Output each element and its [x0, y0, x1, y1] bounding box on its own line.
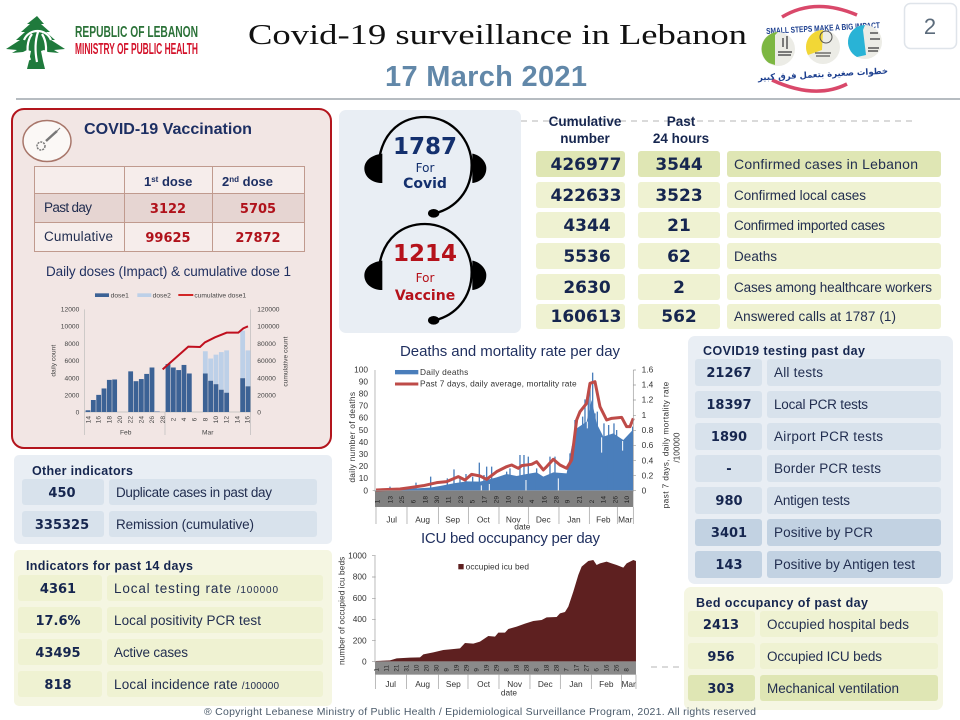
row: incidence rate [18, 671, 323, 697]
chart: ICU bed occupancy: Aug [415, 679, 430, 689]
chart: ICU bed occupancy: Nov [507, 679, 523, 689]
row: incidence rate: Local incidence rate /100000 [114, 677, 279, 692]
chart: daily doses and cumulative dose 1: Mar [202, 429, 214, 436]
chart: ICU bed occupancy: 800 [353, 572, 367, 582]
chart: deaths and mortality rate: 0.4 [642, 455, 654, 465]
chart: deaths and mortality rate: 100 [354, 365, 368, 375]
panel: bed occupancy [684, 587, 943, 710]
row: confirmed imported cases [536, 212, 941, 238]
row: ICU beds: 956 [707, 650, 735, 665]
chart: deaths and mortality rate: 6 [411, 499, 418, 503]
chart: daily doses and cumulative dose 1: 28 [160, 416, 167, 423]
chart: daily doses and cumulative dose 1: 4000 [65, 375, 80, 382]
logo: Ministry of Public Health [6, 16, 198, 69]
row: all tests: All tests [774, 365, 823, 380]
row: confirmed cases in Lebanon: 3544 [655, 155, 703, 175]
chart: daily doses and cumulative dose 1: Feb [120, 429, 132, 436]
chart: ICU bed occupancy: 8 [534, 668, 541, 672]
row: hospital beds: Occupied hospital beds [767, 617, 909, 632]
row: answered calls: Answered calls at 1787 (1) [734, 309, 896, 324]
row: local PCR: Local PCR tests [774, 397, 868, 412]
chart: deaths and mortality rate: 0 [642, 485, 647, 495]
heading: indicators 14 days: Indicators for past 14 days [26, 559, 193, 573]
chart: ICU bed occupancy: 21 [394, 664, 401, 672]
chart: deaths and mortality rate: 10 [506, 496, 513, 503]
row: duplicate cases: Duplicate cases in past day [116, 485, 272, 500]
chart: daily doses and cumulative dose 1: 6000 [65, 358, 80, 365]
row: positive antigen [695, 551, 941, 578]
row: positive PCR: Positive by PCR [774, 525, 873, 540]
chart: deaths and mortality rate: 26 [612, 496, 619, 503]
chart: deaths and mortality rate: 17 [482, 496, 489, 503]
row: confirmed local cases: Confirmed local cases [734, 188, 866, 203]
dose table: 1 [144, 174, 151, 189]
row: answered calls [536, 304, 941, 329]
chart: ICU bed occupancy: 8 [624, 668, 631, 672]
chart: deaths and mortality rate: Mar [618, 515, 633, 525]
chart: daily doses and cumulative dose 1: 12000 [61, 307, 80, 314]
row: ICU beds [688, 643, 938, 669]
row: mechanical ventilation [688, 675, 938, 701]
chart: daily doses and cumulative dose 1: 0 [257, 409, 261, 416]
chart: ICU bed occupancy: Dec [538, 679, 553, 689]
row: positivity [18, 607, 323, 633]
row: positive antigen: 143 [715, 558, 743, 573]
panel: COVID-19 vaccination [12, 109, 331, 448]
dose table: Cumulative [44, 229, 113, 244]
panel: other indicators [14, 455, 332, 544]
chart: deaths and mortality rate: 21 [577, 496, 584, 503]
chart: deaths and mortality rate: Jul [386, 515, 397, 525]
chart: deaths and mortality rate: 30 [434, 496, 441, 503]
chart: ICU bed occupancy: 17 [574, 664, 581, 672]
chart: ICU bed occupancy: date [501, 688, 517, 698]
chart: deaths and mortality rate: 1.6 [642, 365, 654, 375]
footer copyright: ® Copyright Lebanese Ministry of Public Health / Epidemiological Surveillance Program, 2021. All rights reserved [204, 706, 756, 718]
column headers: past 24 hours: 24 hours [653, 131, 709, 146]
chart: deaths and mortality rate: 9 [565, 499, 572, 503]
chart: ICU bed occupancy: 8 [504, 668, 511, 672]
chart: deaths and mortality rate: 13 [387, 496, 394, 503]
row: answered calls: 562 [661, 307, 697, 327]
page number [904, 4, 956, 48]
dose table: 99625 [145, 231, 191, 246]
chart: ICU bed occupancy: 31 [404, 664, 411, 672]
chart: deaths and mortality rate: 22 [517, 496, 524, 503]
chart: daily doses and cumulative dose 1: 2 [171, 417, 178, 421]
chart: ICU bed occupancy: 18 [514, 664, 521, 672]
headset: 1787 for Covid: Covid [403, 176, 447, 192]
chart: daily doses and cumulative dose 1: daily count [50, 345, 57, 377]
chart: ICU bed occupancy: Feb [599, 679, 614, 689]
chart: deaths and mortality rate: 1.4 [642, 380, 654, 390]
chart: daily doses and cumulative dose 1: 22 [128, 416, 135, 423]
row: confirmed cases in Lebanon: 426977 [551, 155, 621, 175]
chart: daily doses and cumulative dose 1: 20000 [257, 392, 276, 399]
row: local PCR: 18397 [706, 398, 752, 413]
dose table: 3122 [150, 202, 186, 217]
headset: 1787 for Covid: For [416, 161, 434, 175]
headset: 1214 for Vaccine [364, 224, 486, 325]
chart: deaths and mortality rate: 25 [399, 496, 406, 503]
chart: daily doses and cumulative dose 1: dose2 [153, 292, 171, 299]
heading: testing: COVID19 testing past day [703, 344, 865, 358]
chart: daily doses and cumulative dose 1: 10000 [61, 324, 80, 331]
row: incidence rate: 818 [44, 678, 72, 693]
row: confirmed local cases [536, 182, 941, 208]
chart: ICU bed occupancy: 1 [374, 668, 381, 672]
row: positivity: 17.6% [35, 614, 81, 629]
chart: ICU bed occupancy: occupied icu bed [466, 561, 529, 571]
chart heading: ICU: ICU bed occupancy per day [421, 530, 600, 547]
row: all tests [695, 359, 941, 386]
row: answered calls: 160613 [551, 307, 621, 327]
panel: hotlines [339, 110, 521, 333]
chart: daily doses and cumulative dose 1: dose1 [111, 292, 129, 299]
chart: ICU bed occupancy: 400 [353, 614, 367, 624]
chart: daily doses and cumulative dose 1: 40000 [257, 375, 276, 382]
chart: daily doses and cumulative dose 1: 26 [149, 416, 156, 423]
chart: daily doses and cumulative dose 1: 14 [85, 416, 92, 423]
headset: 1214 for Vaccine: Vaccine [395, 288, 455, 304]
row: ICU beds: Occupied ICU beds [767, 649, 882, 664]
chart: deaths and mortality rate: 0.8 [642, 425, 654, 435]
logo: small steps campaign [757, 6, 888, 91]
chart: ICU bed occupancy: 200 [353, 635, 367, 645]
row: positive antigen: Positive by Antigen test [774, 557, 915, 572]
chart: ICU bed occupancy: Oct [477, 679, 491, 689]
chart: deaths and mortality rate: 30 [359, 449, 368, 459]
chart: deaths and mortality rate: 18 [422, 496, 429, 503]
chart: ICU bed occupancy: 9 [444, 668, 451, 672]
chart: deaths and mortality rate: 10 [359, 473, 368, 483]
row: mechanical ventilation: Mechanical ventilation [767, 681, 899, 696]
chart: daily doses and cumulative dose 1: 60000 [257, 358, 276, 365]
chart: deaths and mortality rate [347, 365, 681, 531]
dose table: 27872 [235, 231, 281, 246]
chart: ICU bed occupancy: 20 [424, 664, 431, 672]
row: remission [22, 511, 317, 537]
chart: ICU bed occupancy: 27 [584, 664, 591, 672]
headset: 1214 for Vaccine: For [416, 271, 434, 285]
heading: COVID-19 Vaccination: COVID-19 Vaccination [84, 121, 252, 138]
row: antigen [695, 487, 941, 514]
dose table [34, 166, 304, 252]
chart: daily doses and cumulative dose 1: 10 [213, 416, 220, 423]
row: duplicate cases [22, 479, 317, 505]
chart: daily doses and cumulative dose 1: 12 [224, 416, 231, 423]
chart: deaths and mortality rate: /100000 [671, 432, 681, 463]
row: confirmed cases in Lebanon: Confirmed cases in Lebanon [734, 156, 918, 172]
chart: daily doses and cumulative dose 1: 100000 [257, 324, 280, 331]
row: cases among healthcare workers: 2 [673, 278, 685, 298]
chart: daily doses and cumulative dose 1: 8 [202, 417, 209, 421]
chart: daily doses and cumulative dose 1: 16 [245, 416, 252, 423]
chart: deaths and mortality rate: Jan [567, 515, 581, 525]
chart: daily doses and cumulative dose 1: cumulative dose1 [194, 292, 246, 299]
chart: deaths and mortality rate: 4 [529, 499, 536, 503]
dose table: dose [239, 174, 273, 189]
row: border PCR: Border PCR tests [774, 461, 881, 476]
row: deaths [536, 243, 941, 269]
row: deaths: Deaths [734, 249, 777, 264]
logo: small steps campaign: خطوات صغيرة بتعمل فرق كبير [757, 67, 888, 83]
column headers: past 24 hours [653, 114, 709, 146]
row: confirmed imported cases: 4344 [563, 216, 611, 236]
chart: ICU bed occupancy: number of occupied icu beds [337, 557, 347, 665]
dose table: dose [158, 174, 192, 189]
logo: small steps campaign: SMALL STEPS MAKE A BIG IMPACT [766, 20, 881, 36]
chart: ICU bed occupancy: 9 [474, 668, 481, 672]
row: local PCR [695, 391, 941, 418]
panel: testing past day [688, 336, 953, 584]
chart: ICU bed occupancy: 600 [353, 593, 367, 603]
chart: ICU bed occupancy: 11 [384, 665, 391, 672]
chart: daily doses and cumulative dose 1: 14 [234, 416, 241, 423]
chart: deaths and mortality rate: Aug [415, 515, 430, 525]
chart: ICU bed occupancy: 19 [484, 664, 491, 672]
chart: ICU bed occupancy: 28 [554, 664, 561, 672]
chart: ICU bed occupancy: 29 [464, 664, 471, 672]
chart: deaths and mortality rate: 1.2 [642, 395, 654, 405]
chart: daily doses and cumulative dose 1: 2000 [65, 392, 80, 399]
chart: deaths and mortality rate: Oct [477, 515, 490, 525]
chart: daily doses and cumulative dose 1: 120000 [257, 307, 280, 314]
chart: deaths and mortality rate: 20 [359, 461, 368, 471]
chart: deaths and mortality rate: Past 7 days, daily average, mortality rate [420, 379, 577, 389]
row: border PCR: - [726, 462, 732, 477]
heading: other indicators: Other indicators [32, 464, 133, 478]
chart: ICU bed occupancy: Jul [385, 679, 396, 689]
chart: ICU bed occupancy: 16 [604, 664, 611, 672]
chart: deaths and mortality rate: Daily deaths [420, 367, 468, 377]
chart: deaths and mortality rate: Feb [596, 515, 611, 525]
logo: Ministry of Public Health: REPUBLIC OF LEBANON [75, 24, 198, 41]
row: testing rate: Local testing rate /100000 [114, 581, 278, 596]
chart: deaths and mortality rate: Dec [536, 515, 551, 525]
row: antigen: 980 [715, 494, 743, 509]
row: airport PCR [695, 423, 941, 450]
row: positive PCR [695, 519, 941, 546]
dose table: 2 [222, 174, 229, 189]
chart: ICU bed occupancy: Sep [446, 679, 461, 689]
chart: deaths and mortality rate: 2 [589, 499, 596, 503]
row: border PCR [695, 455, 941, 482]
chart: deaths and mortality rate: 90 [359, 377, 368, 387]
chart: ICU bed occupancy: 28 [524, 664, 531, 672]
chart: daily doses and cumulative dose 1: 8000 [65, 341, 80, 348]
column headers: cumulative number: Cumulative [549, 114, 622, 129]
row: all tests: 21267 [706, 366, 752, 381]
chart: daily doses and cumulative dose 1: 6 [192, 417, 199, 421]
chart: ICU bed occupancy: 26 [614, 664, 621, 672]
table: main counts [536, 151, 941, 329]
icon: syringe and virus [23, 120, 71, 162]
row: remission: 335325 [35, 518, 89, 533]
logo: Ministry of Public Health: MINISTRY OF PUBLIC HEALTH [75, 41, 198, 58]
row: duplicate cases: 450 [48, 486, 76, 501]
headset: 1787 for Covid [364, 117, 486, 218]
chart: ICU bed occupancy: 10 [414, 664, 421, 672]
row: cases among healthcare workers: 2630 [563, 278, 611, 298]
chart: deaths and mortality rate: 1 [375, 499, 382, 503]
row: deaths: 62 [667, 247, 691, 267]
row: testing rate [18, 575, 323, 601]
row: cases among healthcare workers [536, 274, 941, 300]
row: hospital beds: 2413 [703, 618, 739, 633]
chart: deaths and mortality rate: date [514, 521, 531, 531]
chart: deaths and mortality rate: 29 [493, 496, 500, 503]
chart: deaths and mortality rate: 11 [446, 496, 453, 503]
row: airport PCR: Airport PCR tests [774, 429, 883, 444]
row: remission: Remission (cumulative) [116, 517, 254, 532]
chart heading: deaths: Deaths and mortality rate per day [400, 343, 620, 360]
chart: deaths and mortality rate: 16 [541, 496, 548, 503]
chart: deaths and mortality rate: 14 [601, 496, 608, 503]
dose table: st [151, 175, 159, 184]
column headers: cumulative number [549, 114, 622, 146]
chart: deaths and mortality rate: 5 [470, 499, 477, 503]
chart: deaths and mortality rate: 0.6 [642, 440, 654, 450]
chart: deaths and mortality rate: 1 [642, 410, 647, 420]
chart: daily doses and cumulative dose 1 [50, 292, 290, 436]
row: confirmed imported cases: Confirmed imported cases [734, 218, 885, 233]
chart: ICU bed occupancy: 29 [494, 664, 501, 672]
chart: daily doses and cumulative dose 1: cumulative count [283, 337, 290, 387]
chart: deaths and mortality rate: 0 [363, 485, 368, 495]
dose table: nd [229, 175, 239, 184]
column headers: past 24 hours: Past [667, 114, 696, 129]
row: positive PCR: 3401 [711, 526, 747, 541]
chart: daily doses and cumulative dose 1: 24 [138, 416, 145, 423]
chart: deaths and mortality rate: 10 [624, 496, 631, 503]
chart: ICU bed occupancy: 30 [434, 664, 441, 672]
dose table: Past day [44, 200, 92, 215]
chart: daily doses and cumulative dose 1: 4 [181, 417, 188, 421]
page number: 2 [924, 14, 936, 39]
row: airport PCR: 1890 [711, 430, 747, 445]
row: antigen: Antigen tests [774, 493, 850, 508]
row: confirmed imported cases: 21 [667, 216, 691, 236]
chart: deaths and mortality rate: 28 [553, 496, 560, 503]
title: Covid-19 surveillance in Lebanon [248, 19, 748, 51]
dose table: 5705 [240, 202, 276, 217]
row: positivity: Local positivity PCR test [114, 613, 261, 628]
row: mechanical ventilation: 303 [707, 682, 735, 697]
chart: ICU bed occupancy: 19 [454, 664, 461, 672]
chart: daily doses and cumulative dose 1: 18 [107, 416, 114, 423]
chart: deaths and mortality rate: 23 [458, 496, 465, 503]
headset: 1787 for Covid: 1787 [393, 134, 457, 160]
chart: ICU bed occupancy: 6 [594, 668, 601, 672]
date subtitle: 17 March 2021 [385, 61, 587, 93]
chart: daily doses and cumulative dose 1: 0 [76, 409, 80, 416]
heading: bed occupancy: Bed occupancy of past day [696, 596, 868, 610]
row: confirmed local cases: 3523 [655, 186, 703, 206]
chart: ICU bed occupancy: 7 [564, 668, 571, 672]
chart: deaths and mortality rate: 70 [359, 401, 368, 411]
row: confirmed local cases: 422633 [551, 186, 621, 206]
chart: deaths and mortality rate: past 7 days, daily mortality rate [660, 381, 670, 508]
row: hospital beds [688, 611, 938, 637]
row: deaths: 5536 [563, 247, 611, 267]
row: active cases: Active cases [114, 645, 188, 660]
chart: deaths and mortality rate: 80 [359, 389, 368, 399]
chart: deaths and mortality rate: 40 [359, 437, 368, 447]
row: cases among healthcare workers: Cases among healthcare workers [734, 280, 932, 295]
chart: ICU bed occupancy: 1000 [348, 550, 367, 560]
row: active cases: 43495 [35, 646, 81, 661]
chart: deaths and mortality rate: daily number of deaths [347, 392, 357, 483]
chart: ICU bed occupancy: Mar [621, 679, 636, 689]
chart: daily doses and cumulative dose 1: 20 [117, 416, 124, 423]
chart: deaths and mortality rate: Nov [506, 515, 522, 525]
chart: ICU bed occupancy: Jan [569, 679, 583, 689]
headset: 1214 for Vaccine: 1214 [393, 241, 457, 267]
chart: daily doses and cumulative dose 1: 16 [96, 416, 103, 423]
column headers: cumulative number: number [560, 131, 610, 146]
chart: deaths and mortality rate: Sep [445, 515, 460, 525]
chart: deaths and mortality rate: 0.2 [642, 470, 654, 480]
row: active cases [18, 639, 323, 665]
chart: ICU bed occupancy [337, 550, 636, 698]
row: testing rate: 4361 [40, 582, 76, 597]
row: confirmed cases in Lebanon [536, 151, 941, 177]
chart heading: daily doses: Daily doses (Impact) & cumulative dose 1 [46, 264, 291, 279]
chart: deaths and mortality rate: 60 [359, 413, 368, 423]
chart: ICU bed occupancy: 18 [544, 664, 551, 672]
panel: indicators for past 14 days [14, 550, 332, 706]
chart: ICU bed occupancy: 0 [362, 656, 367, 666]
chart: deaths and mortality rate: 50 [359, 425, 368, 435]
chart: daily doses and cumulative dose 1: 80000 [257, 341, 276, 348]
